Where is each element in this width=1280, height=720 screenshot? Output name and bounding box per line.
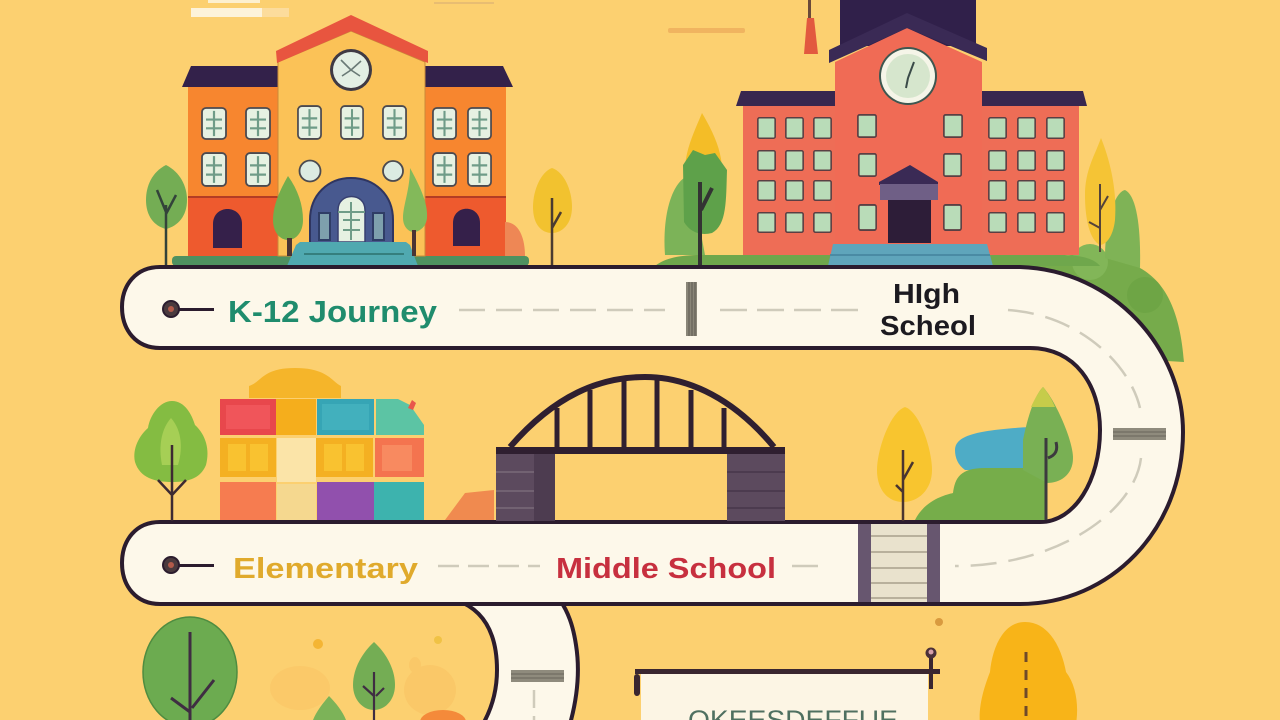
dome	[249, 368, 341, 398]
clock	[879, 47, 937, 105]
label: Elementary: Elementary	[233, 553, 418, 585]
right wing	[425, 66, 525, 256]
road start marker: top	[163, 301, 214, 317]
faint top marks	[191, 0, 745, 33]
arched entrance	[310, 178, 393, 243]
tower	[835, 28, 982, 248]
label: High School: Scheol	[880, 310, 976, 341]
tree	[273, 176, 303, 256]
small tree	[353, 642, 395, 720]
decorative dots	[313, 618, 943, 649]
windows	[202, 106, 491, 186]
ground	[655, 255, 1100, 266]
graduation cap	[804, 0, 976, 54]
windows	[758, 115, 1064, 232]
right yellow tree	[1085, 138, 1115, 252]
label: High School: HIgh	[893, 278, 960, 309]
left wing	[736, 91, 835, 255]
high school building	[655, 13, 1115, 266]
orange rubble	[445, 490, 494, 520]
tower roof	[829, 13, 987, 63]
bridge	[496, 377, 785, 521]
road marker: vertical bar	[686, 282, 697, 336]
pond and bush	[915, 427, 1045, 520]
teal steps	[287, 242, 418, 266]
red gable roof	[276, 15, 428, 63]
big round tree	[143, 617, 237, 720]
lower road branch	[456, 600, 578, 720]
winding road	[122, 267, 1183, 604]
yellow tree	[533, 168, 572, 265]
road start marker: bottom	[163, 557, 214, 573]
clock	[330, 49, 372, 91]
faded background blotches	[270, 657, 456, 715]
yellow tree right	[877, 407, 932, 521]
tree	[146, 165, 187, 265]
tree	[403, 168, 427, 256]
elementary school building	[172, 15, 529, 266]
orange tree bottom right	[980, 622, 1077, 720]
orange shrub	[420, 710, 466, 720]
centre block	[278, 31, 425, 256]
small tree bottom	[313, 696, 346, 720]
hanging banner	[634, 648, 940, 720]
right wing	[982, 91, 1087, 255]
road marker: horizontal bar right	[1113, 428, 1166, 440]
portico and door	[879, 165, 938, 243]
crosswalk	[858, 524, 940, 602]
heading: K-12 Journey: K-12 Journey	[228, 294, 438, 329]
bushes behind high school road	[1005, 190, 1184, 362]
blue steps	[828, 244, 993, 266]
ground	[172, 256, 529, 266]
trees around elementary school	[146, 165, 572, 265]
left tree pair	[664, 113, 727, 265]
tree left of blocks	[134, 401, 208, 521]
road marker: lower branch	[511, 670, 564, 682]
left wing	[182, 66, 278, 256]
label: Middle School: Middle School	[556, 553, 776, 585]
road dashes	[438, 310, 1141, 720]
green tree right	[1023, 387, 1073, 520]
label: High School	[880, 278, 976, 341]
colourful block elementary building	[220, 368, 424, 520]
